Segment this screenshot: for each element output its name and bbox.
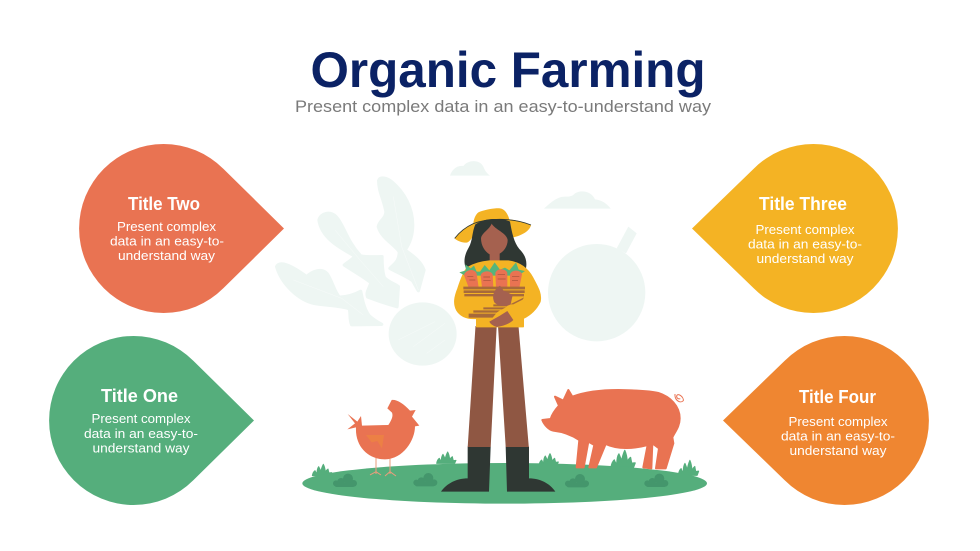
ground scene with animals (302, 390, 707, 504)
legs (468, 326, 529, 447)
heading: Title Four (799, 387, 876, 407)
drop shape (79, 144, 284, 313)
panel: Title Three: data in an easy-to- (748, 236, 862, 252)
hair (464, 219, 526, 268)
icon: round vegetable (548, 227, 645, 341)
text block: Present complex (756, 222, 855, 237)
panel: Title Three: understand way (756, 251, 854, 266)
icon: chicken (347, 400, 419, 476)
boots (441, 447, 555, 492)
heading: Title Two (128, 194, 200, 214)
drop shape (723, 336, 929, 505)
beet leaves (277, 178, 424, 325)
sweater (455, 261, 540, 327)
icon: cloud left (450, 161, 490, 176)
panel: Title Four: understand way (790, 443, 887, 458)
background illustration: beet and clouds (277, 161, 645, 366)
panel: Title Four (723, 336, 929, 505)
icon: cloud right (544, 191, 611, 209)
subtitle: Present complex data in an easy-to-understand way (295, 97, 712, 116)
drop shape (692, 144, 898, 313)
heading: Title One (101, 386, 178, 406)
text block: Present complex (117, 219, 217, 234)
panel: Title Two (79, 144, 284, 313)
basket (463, 287, 525, 318)
panel: Title Three (692, 144, 898, 313)
hat (455, 208, 531, 243)
face and neck (481, 224, 508, 265)
panel: Title One (49, 336, 254, 505)
panel: Title Two: understand way (118, 248, 216, 263)
heading: Title Three (759, 194, 847, 214)
panel: Title Four: data in an easy-to- (781, 428, 895, 444)
text block: Present complex (788, 414, 888, 429)
icon: pig (542, 390, 683, 468)
hands (489, 286, 513, 327)
text block: Present complex (92, 411, 191, 426)
grass tufts (312, 450, 699, 476)
farmer figure (441, 208, 555, 492)
panel: Title Two: data in an easy-to- (110, 234, 224, 248)
icon: turnip (389, 302, 457, 366)
drop shape (49, 336, 254, 505)
panel: Title One: understand way (92, 440, 190, 456)
panel: Title One: data in an easy-to- (84, 426, 198, 441)
bushes (333, 473, 668, 487)
carrots (459, 262, 525, 288)
title: Organic Farming (310, 42, 706, 98)
ground ellipse (302, 463, 707, 504)
